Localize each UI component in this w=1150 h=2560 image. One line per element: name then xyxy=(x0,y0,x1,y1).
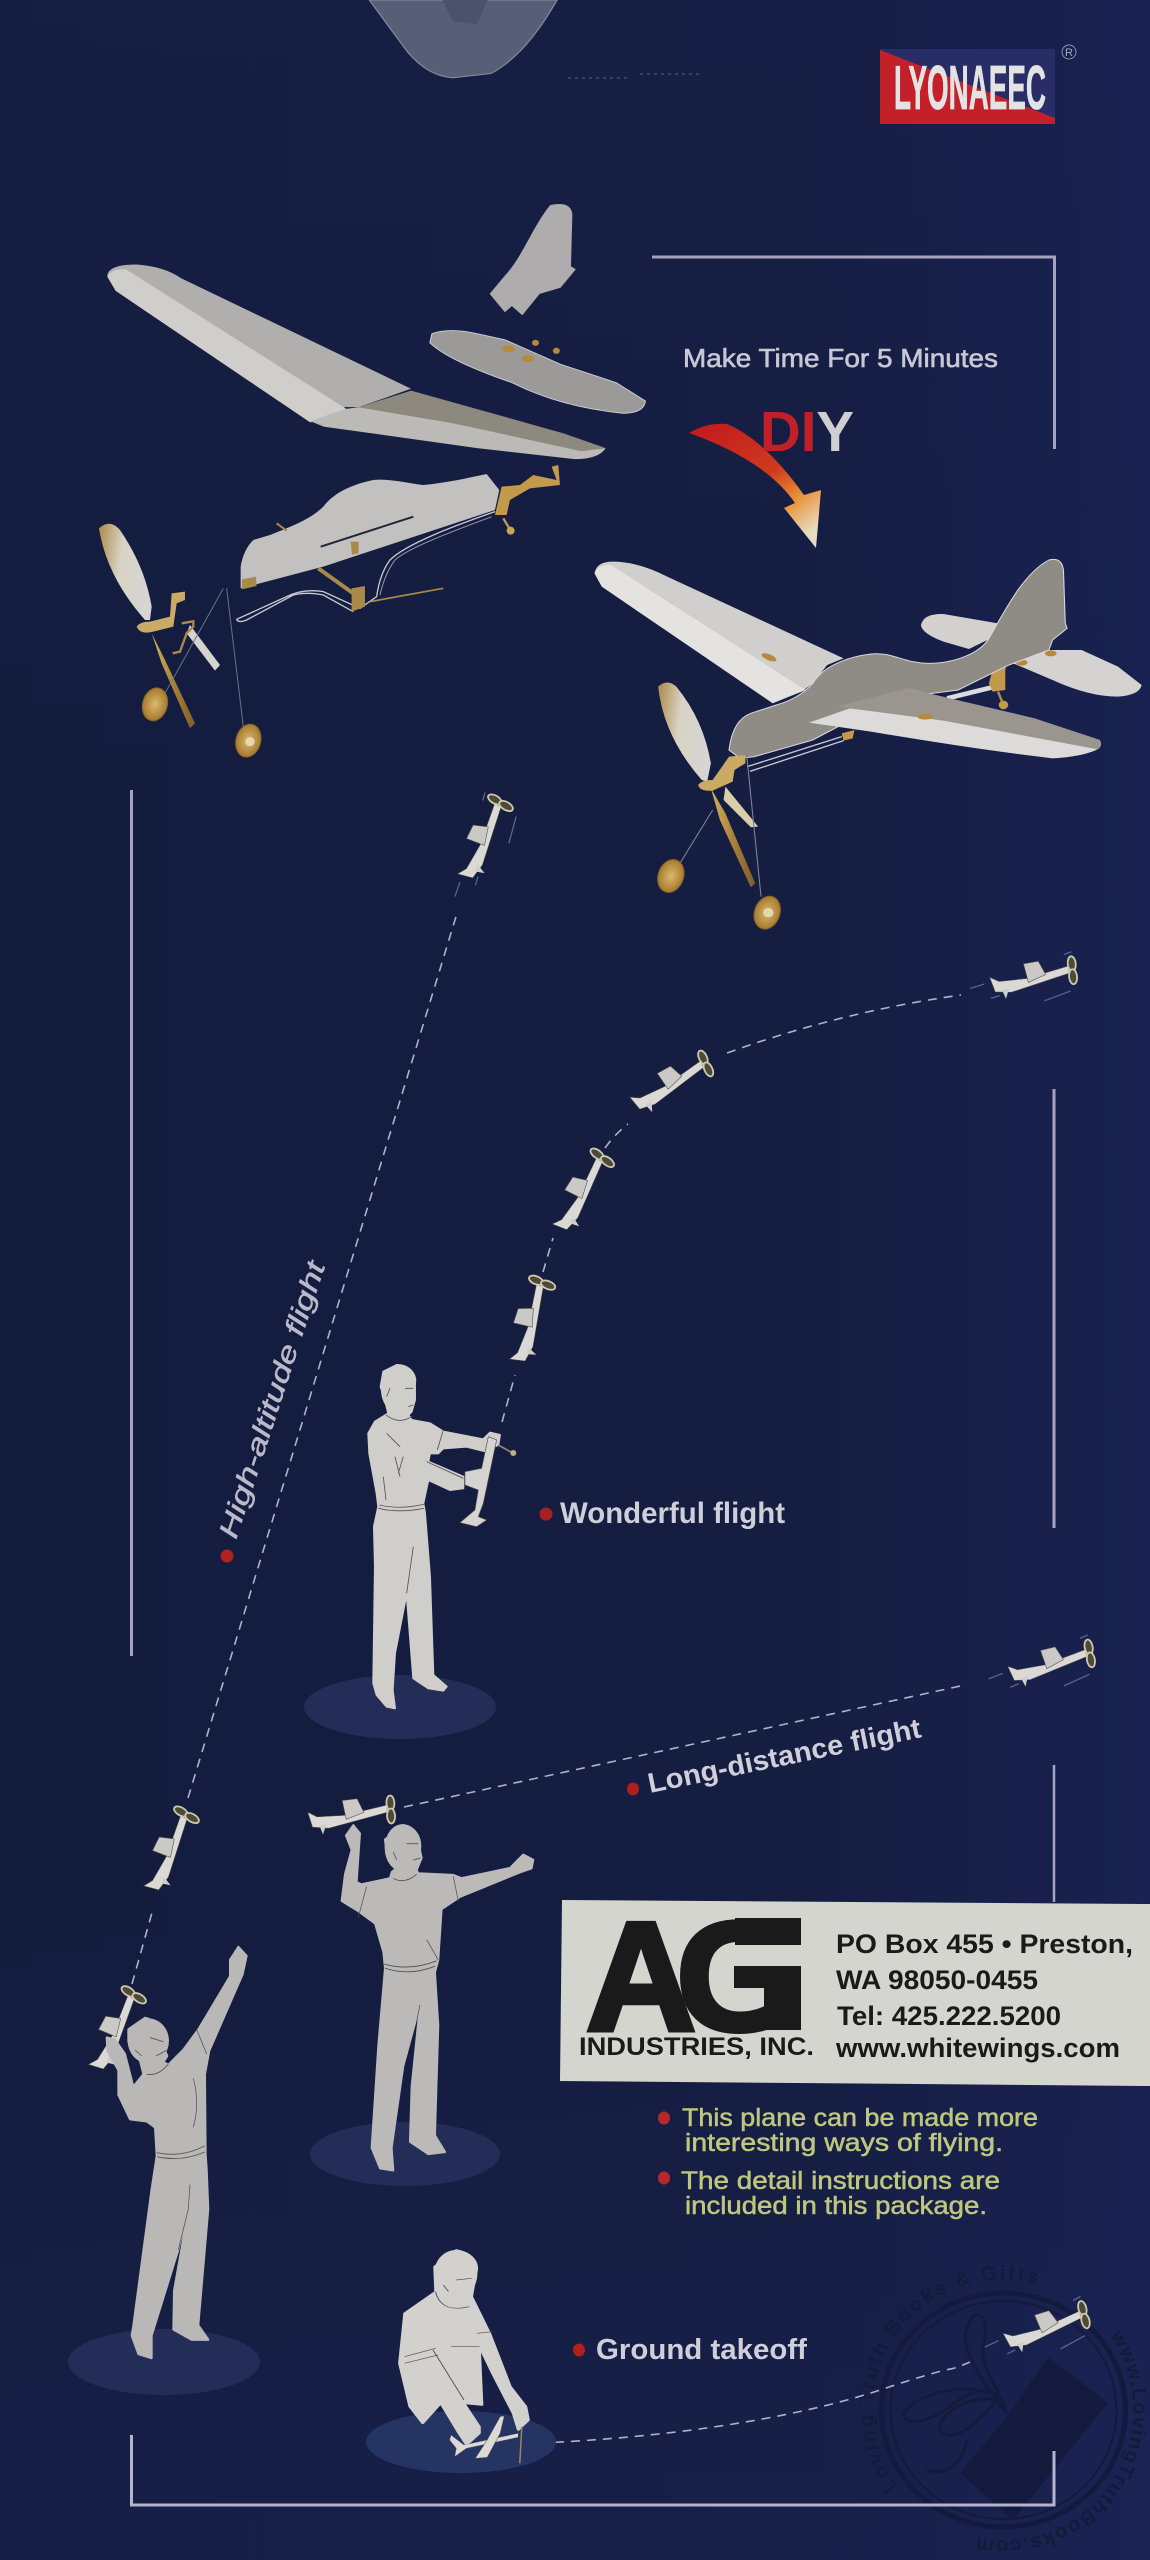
tailplane part xyxy=(430,331,645,413)
ground shadow: high-altitude xyxy=(68,2329,260,2395)
address text: PO Box 455 • Preston, xyxy=(836,1929,1133,1959)
frame: left side line xyxy=(130,790,133,1656)
plane: wonderful flight 4 xyxy=(625,1049,718,1118)
company info panel xyxy=(560,1890,1150,2086)
rubber band and strut xyxy=(237,512,495,621)
fuselage part xyxy=(241,474,499,589)
man: wonderful flight launch xyxy=(368,1365,516,1708)
watermark stamp: Loving Truth Books & Gifts xyxy=(859,2265,1038,2494)
fuselage and fin xyxy=(729,559,1067,758)
logo: LYONAEEC: R xyxy=(1065,47,1073,59)
logo: LYONAEEC xyxy=(880,45,1076,124)
watermark stamp xyxy=(859,2265,1146,2551)
flying planes xyxy=(133,790,1098,2367)
address text: www.whitewings.com xyxy=(835,2033,1120,2063)
near wing xyxy=(809,688,1101,758)
frame: bottom line xyxy=(132,2435,1054,2505)
far wing xyxy=(595,562,844,703)
plane: long-distance end xyxy=(984,1635,1098,1699)
propeller and wheels xyxy=(654,682,784,932)
plane: high-altitude top xyxy=(432,790,526,907)
notes: bullets: interesting ways of flying. xyxy=(685,2129,1003,2157)
ground shadow: wonderful flight xyxy=(304,1675,496,1739)
frame: right side upper line xyxy=(1052,1089,1056,1528)
vertical fin part xyxy=(490,204,576,315)
AG logo: G xyxy=(676,1890,802,2063)
ground shadow: ground takeoff xyxy=(366,2411,556,2473)
ground shadow: long-distance xyxy=(310,2122,500,2186)
watermark stamp: www.LovingTruthBooks.com xyxy=(977,2330,1146,2551)
plane: wonderful flight 2 xyxy=(498,1274,564,1368)
assembled plane xyxy=(595,559,1142,932)
text: Make Time For 5 Minutes: Make Time For 5 Minutes xyxy=(683,343,998,373)
rear rod and bracket xyxy=(947,662,1008,709)
exploded plane: fin, tailplane and wing xyxy=(107,204,645,459)
label: High-altitude flight: High-altitude flight xyxy=(213,1256,332,1542)
notes: bullets: The detail instructions are xyxy=(681,2167,1000,2195)
DIY arrow xyxy=(689,424,821,548)
main wing part xyxy=(107,264,606,459)
man: high-altitude launch xyxy=(78,1947,247,2358)
AG logo: A xyxy=(586,1890,696,2063)
tailplane xyxy=(921,614,1142,697)
AG logo xyxy=(586,1890,803,2063)
exploded plane: fuselage, propeller, wheels xyxy=(99,465,560,760)
plane: high-altitude middle xyxy=(133,1804,207,1897)
man: long-distance launch xyxy=(307,1795,533,2170)
plane: wonderful flight 3 xyxy=(542,1146,622,1238)
plane: ground takeoff end xyxy=(979,2296,1094,2367)
label: Long-distance flight: Long-distance flight xyxy=(645,1713,924,1799)
propeller and wheels part xyxy=(99,524,265,760)
plane on ground xyxy=(450,2416,522,2463)
label: Wonderful flight: Wonderful flight xyxy=(560,1497,785,1530)
plane: wonderful flight end xyxy=(967,951,1079,1008)
address text: Tel: 425.222.5200 xyxy=(837,2001,1061,2031)
DIY heading: DIY xyxy=(760,400,854,464)
notes: bullets: included in this package. xyxy=(685,2192,987,2220)
tail hook xyxy=(495,465,560,535)
frame: top right corner xyxy=(652,257,1054,449)
address text xyxy=(835,1929,1133,2063)
bullet dot 2 xyxy=(658,2172,670,2184)
label: High-altitude flight xyxy=(213,1256,332,1562)
label: Ground takeoff: Ground takeoff xyxy=(596,2334,807,2366)
flight paths (dashed) xyxy=(132,910,970,2443)
man: ground takeoff kneeling xyxy=(399,2250,529,2463)
rubber tube xyxy=(747,730,854,771)
notes: bullets xyxy=(658,2104,1038,2220)
notes: bullets: This plane can be made more xyxy=(682,2104,1038,2132)
address text: WA 98050-0455 xyxy=(836,1965,1038,1995)
company name: INDUSTRIES, INC. xyxy=(579,2033,814,2061)
bullet dot 1 xyxy=(658,2112,670,2124)
frame: right side lower line xyxy=(1053,1765,1055,1902)
hanger clip at top xyxy=(369,0,557,78)
